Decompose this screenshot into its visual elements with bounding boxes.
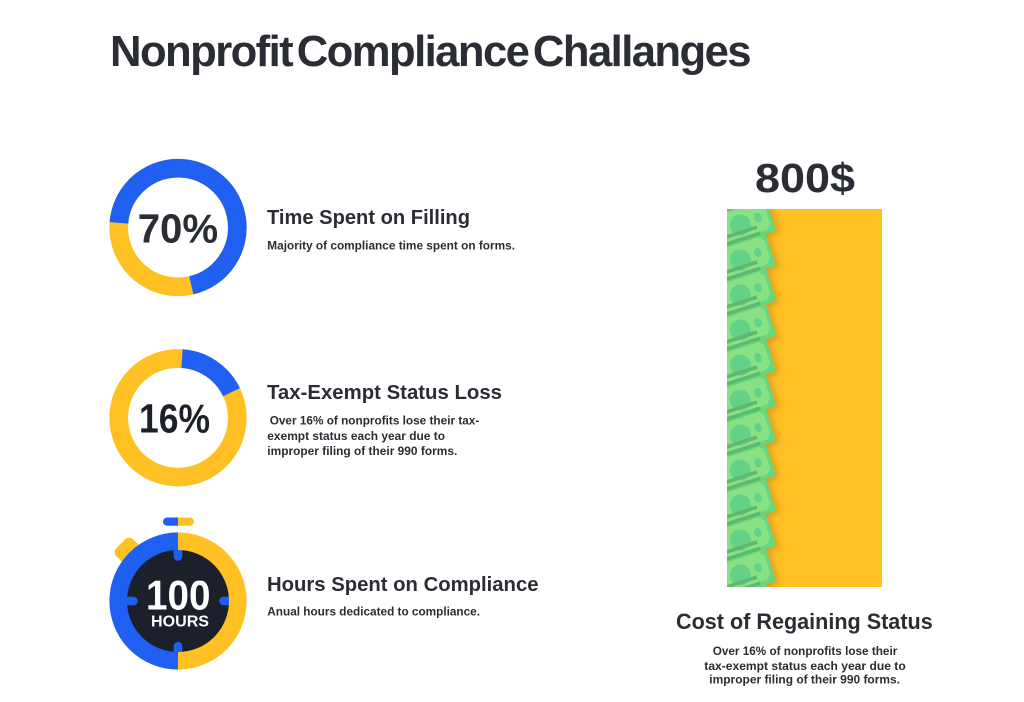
text block: cost of regaining status: improper filing of their 990 forms. bbox=[709, 672, 900, 686]
text block: cost of regaining status: Cost of Regaining Status bbox=[676, 609, 933, 634]
donut chart: 70% bbox=[119, 168, 237, 287]
donut chart: 70%: 70% bbox=[138, 205, 218, 251]
text block: tax-exempt status loss: Tax-Exempt Status Loss bbox=[267, 381, 502, 404]
donut chart: 16%: 16% bbox=[139, 396, 210, 442]
text block: hours spent on compliance: Hours Spent on Compliance bbox=[267, 573, 538, 596]
title: Nonprofit Compliance Challanges bbox=[110, 27, 750, 76]
text block: cost of regaining status: tax-exempt status each year due to bbox=[704, 659, 906, 673]
text block: cost of regaining status bbox=[676, 609, 933, 686]
stopwatch ring bbox=[118, 541, 238, 661]
donut chart: 16% bbox=[119, 358, 237, 477]
stopwatch top button bbox=[163, 518, 194, 526]
text block: hours spent on compliance: Anual hours dedicated to compliance. bbox=[267, 605, 480, 619]
stopwatch side knob bbox=[112, 535, 150, 573]
bar with money stack bbox=[727, 209, 882, 587]
stopwatch dial bbox=[126, 549, 230, 653]
stopwatch label: HOURS bbox=[151, 614, 209, 631]
text block: hours spent on compliance bbox=[267, 573, 538, 619]
icon: stopwatch 100 hours bbox=[112, 518, 238, 661]
text block: time spent on filling bbox=[267, 206, 515, 252]
text block: time spent on filling: Time Spent on Filling bbox=[267, 206, 470, 229]
text block: tax-exempt status loss bbox=[267, 381, 502, 458]
text block: tax-exempt status loss: Over 16% of nonprofits lose their tax- bbox=[270, 413, 479, 427]
icon: stacked green bills bbox=[727, 209, 780, 587]
stopwatch label: 100 bbox=[146, 572, 210, 618]
stopwatch ticks bbox=[122, 545, 234, 657]
text block: time spent on filling: Majority of compliance time spent on forms. bbox=[267, 238, 515, 252]
text block: cost of regaining status: Over 16% of nonprofits lose their bbox=[713, 644, 898, 658]
text block: tax-exempt status loss: improper filing of their 990 forms. bbox=[267, 444, 457, 458]
value: 800$: 800$ bbox=[755, 155, 855, 201]
text block: tax-exempt status loss: exempt status each year due to bbox=[267, 429, 445, 443]
